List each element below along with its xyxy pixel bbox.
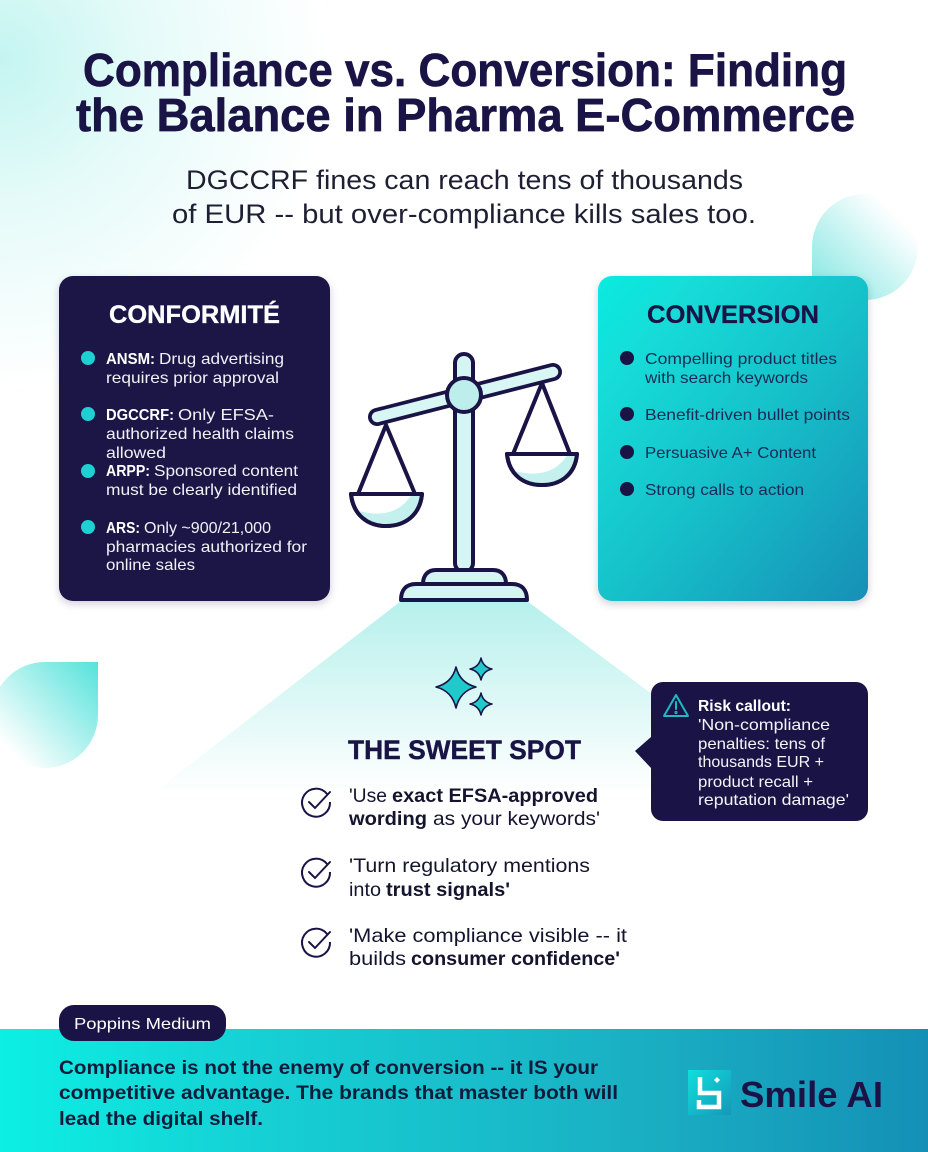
- list: conversion: Benefit-driven bullet points: [645, 407, 850, 424]
- subtitle: [172, 165, 756, 229]
- icon: check circle 2: [302, 859, 330, 887]
- title: [76, 44, 855, 141]
- sweet spot item 1: as your keywords': [433, 808, 600, 830]
- pill label: [59, 1005, 226, 1041]
- icon: warning triangle: [664, 695, 688, 716]
- callout text: [698, 698, 849, 809]
- footer band: [0, 1029, 928, 1152]
- pill label: Poppins Medium: [74, 1016, 211, 1033]
- list: conformité: Only ~900/21,000: [144, 520, 271, 537]
- list: conformité: online sales: [106, 557, 195, 574]
- callout text: 'Non-compliance: [698, 717, 830, 734]
- list: conformité: requires prior approval: [106, 370, 279, 387]
- bullets: conformité: [81, 351, 95, 534]
- sweet spot item 2: into: [349, 879, 381, 901]
- list: conformité: Drug advertising: [159, 351, 284, 368]
- sweet spot item 2: 'Turn regulatory mentions: [349, 855, 590, 877]
- icon: balance scale: [350, 354, 580, 600]
- callout text: thousands EUR +: [698, 754, 824, 771]
- top background gradient: [0, 0, 928, 400]
- heading: the sweet spot: THE SWEET SPOT: [348, 735, 581, 765]
- heading: conversion: CONVERSION: [647, 301, 819, 329]
- decorative leaf: left: [0, 662, 98, 768]
- list: conformité: ANSM:: [106, 351, 155, 368]
- sweet spot item 2: [302, 855, 590, 901]
- title: the Balance in Pharma E-Commerce: [76, 89, 855, 141]
- callout text: reputation damage': [698, 792, 849, 809]
- icon: logo mark: [688, 1070, 731, 1115]
- sweet spot item 1: 'Use: [349, 785, 387, 807]
- list: conversion: Compelling product titles: [645, 351, 837, 368]
- callout text: Risk callout:: [698, 698, 791, 715]
- list: conformité: ARPP:: [106, 463, 150, 480]
- list: conformité: pharmacies authorized for: [106, 539, 308, 556]
- list: conformité: must be clearly identified: [106, 482, 297, 499]
- footer statement: lead the digital shelf.: [59, 1108, 263, 1130]
- callout: risk: [635, 682, 868, 821]
- bullets: conversion: [620, 351, 634, 496]
- subtitle: DGCCRF fines can reach tens of thousands: [186, 165, 743, 195]
- list: conformité: Only EFSA-: [178, 407, 274, 424]
- heading: conformité: CONFORMITÉ: [109, 300, 280, 329]
- list: conformité: DGCCRF:: [106, 407, 174, 424]
- list: conformité: ARS:: [106, 520, 140, 537]
- sweet spot item 3: [302, 925, 628, 970]
- subtitle: of EUR -- but over-compliance kills sales too.: [172, 199, 756, 229]
- footer statement: competitive advantage. The brands that master both will: [59, 1082, 618, 1104]
- logo: Smile AI: Smile AI: [740, 1074, 883, 1115]
- list: conversion: with search keywords: [644, 370, 808, 387]
- decorative leaf: top right: [812, 194, 918, 300]
- footer statement: Compliance is not the enemy of conversion -- it IS your: [59, 1057, 598, 1079]
- sweet spot item 3: consumer confidence': [411, 948, 620, 970]
- panel: conversion: [598, 276, 868, 601]
- sweet spot item 1: [302, 785, 600, 830]
- callout text: product recall +: [698, 774, 813, 791]
- sweet spot item 1: exact EFSA-approved: [392, 785, 598, 807]
- icon: sparkles: [436, 658, 492, 715]
- spotlight beam under scale: [130, 601, 700, 830]
- callout text: penalties: tens of: [698, 736, 826, 753]
- sweet spot item 3: builds: [349, 948, 406, 970]
- title: Compliance vs. Conversion: Finding: [83, 44, 847, 96]
- sweet spot item 1: wording: [348, 808, 427, 830]
- icon: check circle 1: [302, 789, 330, 817]
- footer statement: [59, 1057, 618, 1130]
- logo: Smile AI: [688, 1070, 883, 1115]
- panel: conformité: [59, 276, 330, 601]
- list: conformité: allowed: [106, 445, 166, 462]
- icon: check circle 3: [302, 929, 330, 957]
- sweet spot item 2: trust signals': [386, 879, 510, 901]
- list: conversion: Persuasive A+ Content: [645, 445, 817, 462]
- list: conversion: [644, 351, 850, 499]
- list: conformité: authorized health claims: [106, 426, 294, 443]
- sweet spot item 3: 'Make compliance visible -- it: [349, 925, 628, 947]
- list: conformité: [106, 351, 308, 574]
- list: conformité: Sponsored content: [154, 463, 299, 480]
- list: conversion: Strong calls to action: [645, 482, 804, 499]
